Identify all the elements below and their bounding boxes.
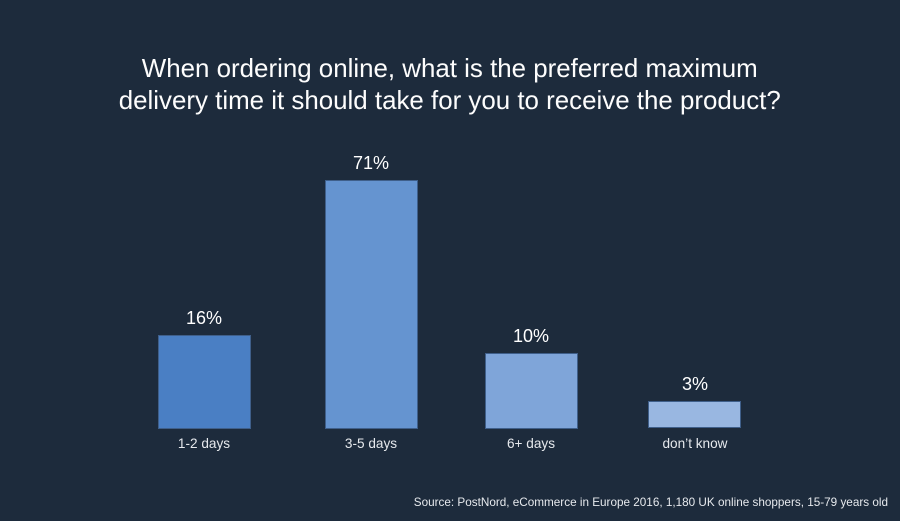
bar: 3-5 days <box>325 180 418 428</box>
value: 16%: 16% <box>186 308 222 328</box>
title <box>119 55 781 115</box>
bar chart <box>158 153 741 451</box>
source note: Source: PostNord, eCommerce in Europe 2016, 1,180 UK online shoppers, 15-79 years old <box>414 496 888 509</box>
bar: 6+ days <box>485 353 578 428</box>
value: 71%: 71% <box>353 153 389 173</box>
label: 6+ days: 6+ days <box>507 436 555 451</box>
title: When ordering online, what is the preferred maximum <box>142 55 758 83</box>
title: delivery time it should take for you to receive the product? <box>119 87 781 115</box>
bar: don't know <box>648 401 741 428</box>
label: 3-5 days: 3-5 days <box>345 436 397 451</box>
value: 3%: 3% <box>682 374 708 394</box>
bar: 1-2 days <box>158 335 250 428</box>
label: 1-2 days: 1-2 days <box>178 436 230 451</box>
label: don't know: don’t know <box>662 436 728 451</box>
value: 10%: 10% <box>513 326 549 346</box>
